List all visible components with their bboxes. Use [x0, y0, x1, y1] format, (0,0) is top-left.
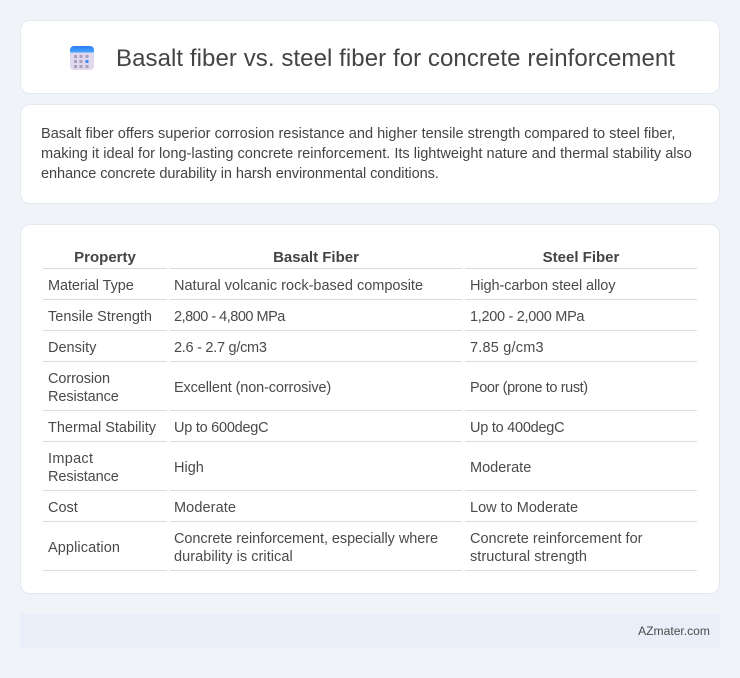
row: cost [48, 500, 578, 516]
summary text: enhance concrete durability in harsh environmental conditions. [41, 166, 439, 182]
summary text: making it ideal for long-lasting concrete reinforcement. Its lightweight nature and thermal stability also [41, 146, 692, 162]
row: tensile strength [48, 309, 584, 325]
row: impact resistance [48, 451, 531, 485]
row: tensile strength: Tensile Strength [48, 309, 152, 325]
summary text [41, 126, 692, 182]
row: cost: Cost [48, 500, 78, 516]
row: application: Concrete reinforcement, especially where [174, 531, 438, 547]
row: corrosion resistance: Excellent (non-corrosive) [174, 380, 331, 396]
icon: calendar [70, 46, 94, 70]
row: thermal stability: Thermal Stability [48, 420, 156, 436]
row: density [48, 340, 544, 356]
row: density: 7.85 g/cm3 [470, 340, 544, 356]
row: impact resistance: High [174, 460, 204, 476]
comparison table [43, 249, 697, 571]
table header: Property [74, 249, 136, 266]
footer bar [20, 614, 720, 648]
row: cost: Low to Moderate [470, 500, 578, 516]
row: material type [48, 278, 616, 294]
row: corrosion resistance: Poor (prone to rust) [470, 380, 588, 396]
row: application [48, 531, 642, 565]
row: material type: Natural volcanic rock-based composite [174, 278, 423, 294]
table header: Steel Fiber [543, 249, 619, 266]
footer credit: AZmater.com [638, 624, 710, 638]
row: application: structural strength [470, 549, 587, 565]
row: impact resistance: Moderate [470, 460, 531, 476]
row: impact resistance: Resistance [48, 469, 119, 485]
table header: Basalt Fiber [273, 249, 359, 266]
row: impact resistance: Impact [48, 451, 93, 467]
panel: comparison table card [20, 224, 720, 594]
row: thermal stability: Up to 400degC [470, 420, 564, 436]
row: density: 2.6 - 2.7 g/cm3 [174, 340, 267, 356]
panel: summary card [20, 104, 720, 204]
panel: title card [20, 20, 720, 94]
row: application: durability is critical [174, 549, 293, 565]
row: material type: High-carbon steel alloy [470, 278, 615, 294]
row: tensile strength: 2,800 - 4,800 MPa [174, 309, 285, 325]
row: corrosion resistance [48, 371, 588, 405]
row: thermal stability: Up to 600degC [174, 420, 268, 436]
table header [74, 249, 620, 266]
row: material type: Material Type [48, 278, 134, 294]
row: corrosion resistance: Resistance [48, 389, 119, 405]
row: tensile strength: 1,200 - 2,000 MPa [470, 309, 584, 325]
title: Basalt fiber vs. steel fiber for concrete reinforcement [116, 45, 675, 72]
row: density: Density [48, 340, 96, 356]
row: application: Concrete reinforcement for [470, 531, 642, 547]
row: cost: Moderate [174, 500, 236, 516]
summary text: Basalt fiber offers superior corrosion resistance and higher tensile strength compared to steel fiber, [41, 126, 675, 142]
row: corrosion resistance: Corrosion [48, 371, 110, 387]
row: application: Application [48, 540, 120, 556]
row: thermal stability [48, 420, 564, 436]
